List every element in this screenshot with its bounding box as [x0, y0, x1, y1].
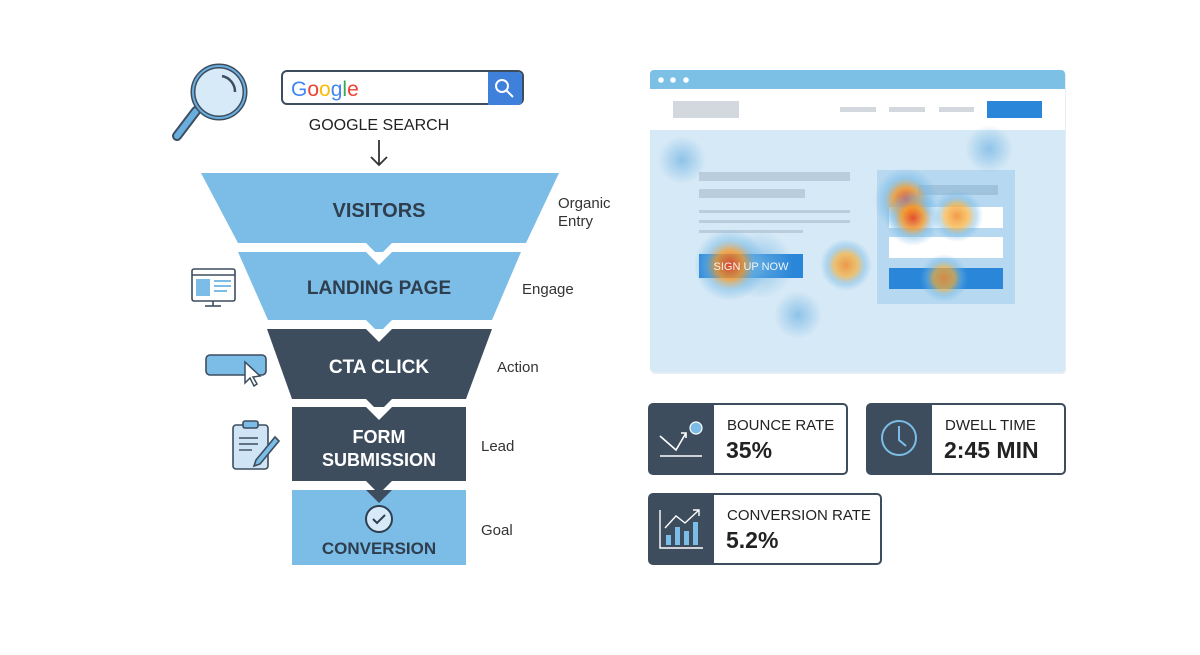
google search bar: Google	[291, 78, 359, 101]
stat card: dwell time: DWELL TIME	[945, 417, 1036, 434]
stat card: conversion rate: CONVERSION RATE	[727, 507, 871, 524]
google search bar	[282, 71, 523, 105]
funnel: conversion	[292, 490, 466, 565]
stage labels: Goal	[481, 522, 513, 539]
funnel: conversion: CONVERSION	[322, 539, 436, 558]
stage labels	[481, 195, 611, 539]
stat card: dwell time: 2:45 MIN	[944, 437, 1039, 463]
stat card: conversion rate: 5.2%	[726, 527, 778, 553]
icon: button with cursor	[206, 355, 266, 386]
funnel: landing page	[238, 252, 521, 333]
funnel: cta click: CTA CLICK	[329, 357, 429, 378]
stat card: dwell time	[867, 404, 1065, 474]
heatmap browser	[650, 70, 1066, 374]
stat card: conversion rate	[649, 494, 881, 564]
stat card: bounce rate: BOUNCE RATE	[727, 417, 834, 434]
stat card: bounce rate	[649, 404, 847, 474]
icon: magnifying glass	[177, 66, 245, 136]
funnel: visitors	[201, 173, 559, 256]
arrow down	[371, 140, 387, 165]
funnel: form submission: SUBMISSION	[322, 450, 436, 470]
icon: monitor	[192, 269, 235, 306]
stage labels: Entry	[558, 213, 594, 230]
icon: clipboard	[233, 421, 279, 469]
funnel: form submission: FORM	[352, 427, 406, 447]
stat card: bounce rate: 35%	[726, 437, 772, 463]
stage labels: Engage	[522, 281, 574, 298]
stage labels: Action	[497, 359, 539, 376]
stage labels: Lead	[481, 438, 514, 455]
funnel: visitors: VISITORS	[332, 200, 426, 222]
funnel: form submission	[292, 407, 466, 494]
stage labels: Organic	[558, 195, 611, 212]
heatmap browser: SIGN UP NOW	[714, 261, 789, 273]
funnel: cta click	[267, 329, 492, 412]
funnel: landing page: LANDING PAGE	[307, 278, 451, 299]
heading: google search: GOOGLE SEARCH	[309, 117, 449, 134]
